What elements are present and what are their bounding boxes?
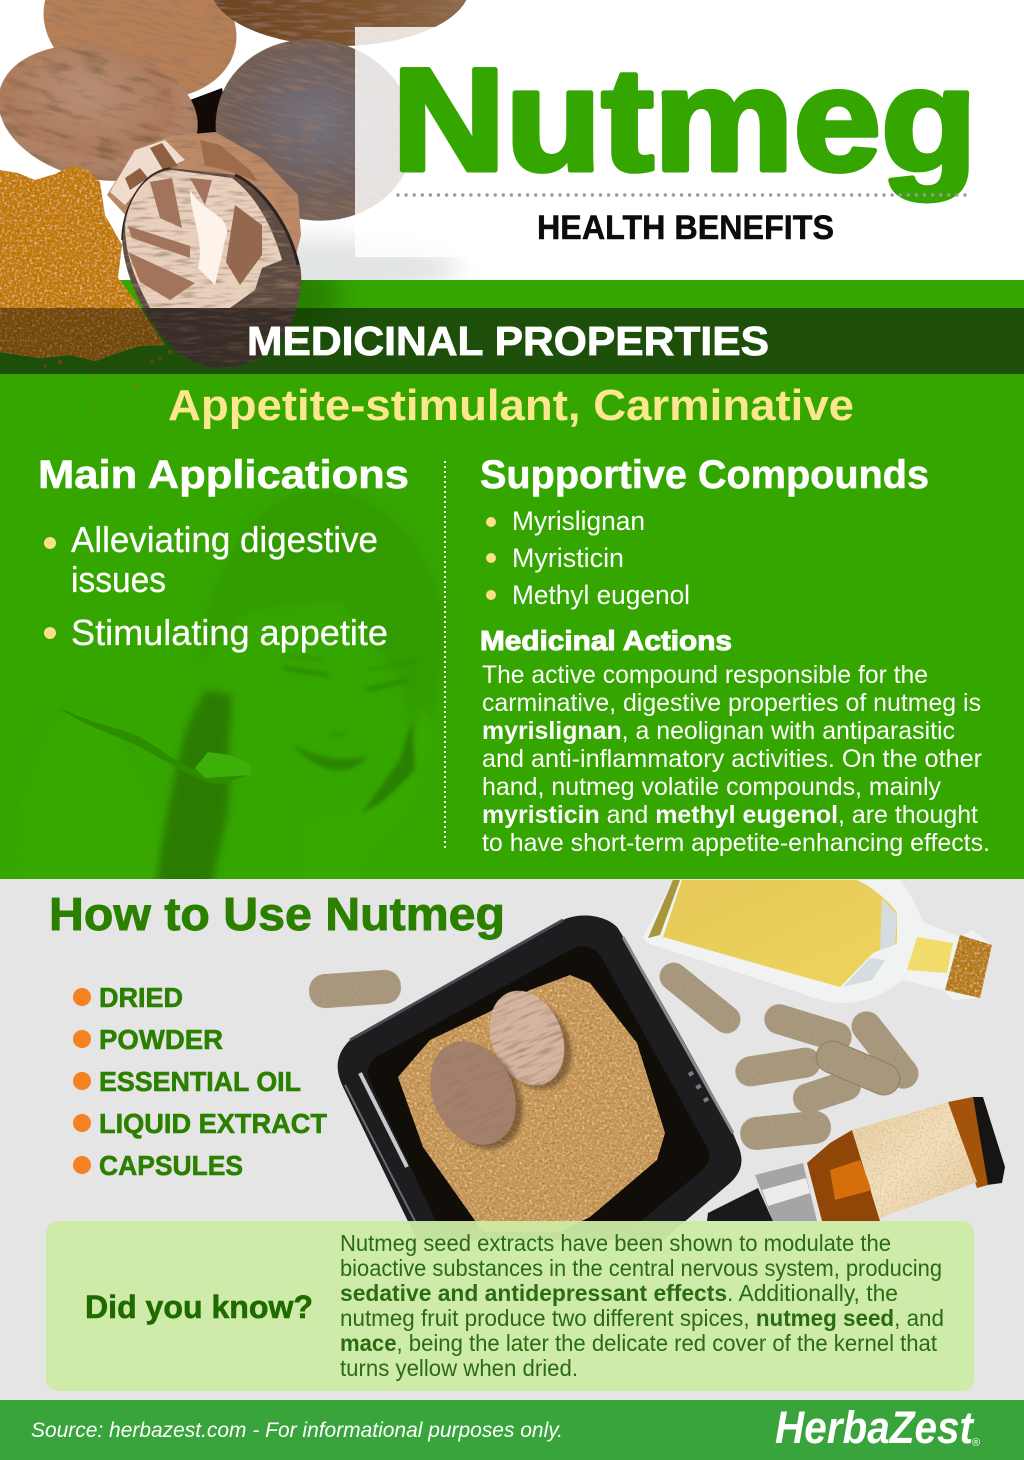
footer <box>0 1400 1024 1460</box>
list: forms of use: POWDER <box>99 1024 223 1055</box>
heading: medicinal properties: MEDICINAL PROPERTIES <box>247 318 769 364</box>
list: main applications: issues <box>71 559 166 600</box>
list: main applications: Stimulating appetite <box>71 612 388 653</box>
text: medicinal actions paragraph: to have short-term appetite-enhancing effects. <box>482 829 990 857</box>
text: medicinal actions paragraph: myristicin and methyl eugenol, are thought <box>482 801 978 829</box>
cut face of seed <box>125 170 282 308</box>
text: medicinal actions paragraph <box>482 661 990 857</box>
text: medicinal actions paragraph: carminative, digestive properties of nutmeg is <box>482 689 981 717</box>
text: medicinal actions paragraph: and anti-inflammatory activities. On the other <box>482 745 982 773</box>
list: compounds: Myrislignan <box>512 506 645 536</box>
powder in bowl <box>398 975 665 1232</box>
did you know text: mace, being the later the delicate red cover of the kernel that <box>340 1330 937 1356</box>
list: main applications: Alleviating digestive <box>71 519 378 560</box>
image: woman eating, tinted green <box>61 494 439 879</box>
panel: did you know <box>46 1221 974 1391</box>
did you know text: Nutmeg seed extracts have been shown to modulate the <box>340 1230 891 1256</box>
list: forms of use: ESSENTIAL OIL <box>99 1066 301 1097</box>
dotted rule under title <box>398 193 970 197</box>
section band: medicinal properties background <box>0 308 1024 374</box>
did you know text <box>340 1230 944 1381</box>
cut seed behind <box>107 132 301 300</box>
heading: supportive compounds: Supportive Compounds <box>480 453 929 497</box>
text: medicinal actions paragraph: myrislignan, a neolignan with antiparasitic <box>482 717 955 745</box>
did you know heading: Did you know? <box>85 1289 313 1325</box>
powder specks <box>44 333 302 443</box>
heading: main applications: Main Applications <box>38 453 409 497</box>
image: black bowl with powder <box>338 916 741 1240</box>
did you know text: sedative and antidepressant effects. Additionally, the <box>340 1280 898 1306</box>
text: medicinal actions paragraph: The active compound responsible for the <box>482 661 928 689</box>
list: forms of use <box>73 982 327 1181</box>
list: main applications <box>44 519 388 653</box>
text: medicinal actions paragraph: hand, nutmeg volatile compounds, mainly <box>482 773 941 801</box>
list: forms of use: LIQUID EXTRACT <box>99 1108 327 1139</box>
list: compounds: Myristicin <box>512 543 624 573</box>
list: compounds <box>486 506 690 610</box>
image: oil bottle <box>643 880 992 1003</box>
image: nutmeg seeds and powder <box>0 0 470 443</box>
source note: Source: herbazest.com - For informational purposes only. <box>31 1419 563 1442</box>
did you know text: nutmeg fruit produce two different spices, nutmeg seed, and <box>340 1305 944 1331</box>
logo: HerbaZest <box>775 1402 975 1453</box>
image: capsules <box>308 957 925 1152</box>
dotted divider <box>444 461 446 850</box>
did you know text: bioactive substances in the central nervous system, producing <box>340 1255 942 1281</box>
subheading: properties: Appetite-stimulant, Carminative <box>168 381 854 430</box>
logo: ® <box>972 1437 980 1449</box>
list: compounds: Methyl eugenol <box>512 580 690 610</box>
image: darkened band portion of seeds <box>0 308 330 368</box>
did you know text: turns yellow when dried. <box>340 1355 578 1381</box>
image: dropper bottle <box>707 1097 1005 1221</box>
list: forms of use: CAPSULES <box>99 1150 243 1181</box>
title: Nutmeg <box>392 38 977 201</box>
nutmeg seeds in bowl <box>485 989 585 1101</box>
title panel <box>355 27 1024 257</box>
subtitle: HEALTH BENEFITS <box>537 209 834 247</box>
front seed with shell <box>122 168 302 368</box>
orange powder pile <box>0 166 165 361</box>
list: forms of use: DRIED <box>99 982 183 1013</box>
heading: how to use: How to Use Nutmeg <box>49 888 505 940</box>
heading: medicinal actions: Medicinal Actions <box>480 625 732 656</box>
